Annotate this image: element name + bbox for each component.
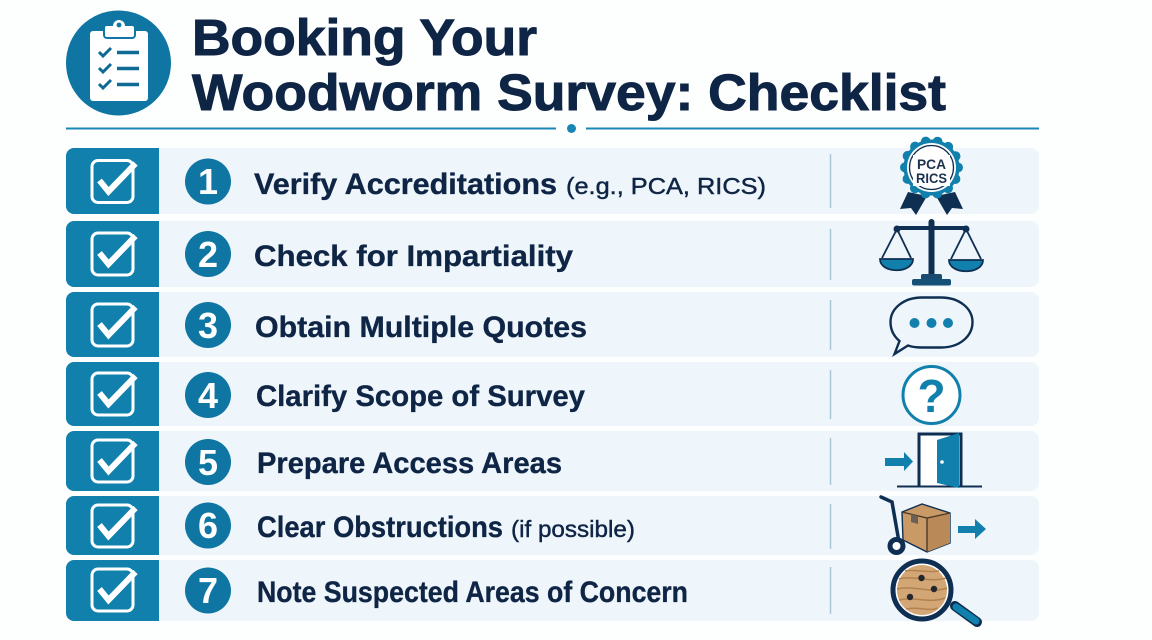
icon: hand truck with box [881, 497, 986, 552]
panel: item 3 [66, 292, 1039, 357]
panel: item 2: 2 [198, 234, 218, 275]
title [192, 9, 946, 121]
title: Woodworm Survey: Checklist [192, 64, 946, 121]
panel: item 1: 1 [198, 161, 218, 202]
icon: question mark: ? [917, 370, 946, 422]
icon: scales [880, 222, 983, 286]
panel: item 7: Note Suspected Areas of Concern [257, 576, 688, 609]
panel: item 4: Clarify Scope of Survey [256, 380, 585, 413]
icon: magnifier over wood [893, 561, 977, 622]
panel: item 7: 7 [198, 570, 218, 611]
panel: item 3: 3 [198, 305, 218, 346]
panel: item 6: (if possible) [511, 516, 635, 542]
panel: item 3: Obtain Multiple Quotes [255, 311, 587, 344]
panel: item 4: 4 [198, 375, 218, 416]
title divider [66, 124, 1039, 133]
panel: item 5 [66, 431, 1039, 491]
icon: accreditation badge [900, 140, 963, 215]
panel: item 5: 5 [198, 442, 218, 483]
panel: item 5: Prepare Access Areas [257, 447, 562, 480]
panel: item 4 [66, 362, 1039, 426]
panel: item 6: Clear Obstructions [257, 511, 503, 544]
panel: item 6 [66, 496, 1039, 555]
panel: item 7 [66, 560, 1039, 621]
panel: item 1 [66, 148, 1039, 214]
panel: item 1: Verify Accreditations [254, 168, 557, 201]
icon: question mark [903, 366, 960, 424]
icon: speech bubble [890, 298, 972, 354]
icon: accreditation badge: RICS [916, 170, 947, 186]
panel: item 6: 6 [198, 505, 218, 546]
panel: item 2: Check for Impartiality [254, 240, 573, 273]
panel: item 2 [66, 221, 1039, 287]
panel: item 1: (e.g., PCA, RICS) [566, 173, 766, 199]
icon: accreditation badge: PCA [917, 156, 946, 172]
icon: clipboard checklist [66, 10, 171, 116]
title: Booking Your [192, 9, 537, 66]
icon: door with arrow [885, 433, 982, 488]
